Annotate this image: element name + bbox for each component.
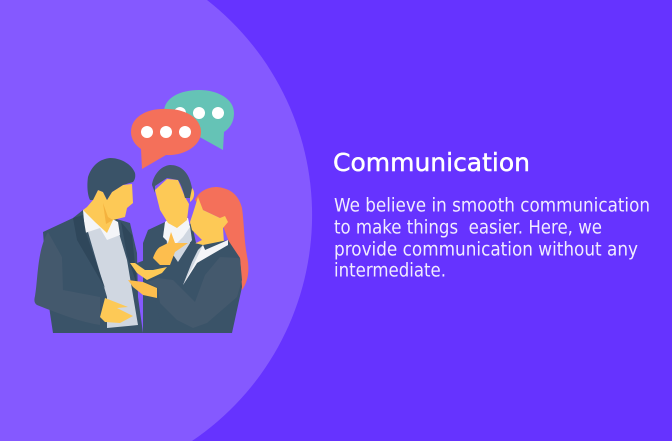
large light purple circle xyxy=(0,0,312,441)
body text: intermediate. xyxy=(334,260,446,282)
body text: provide communication without any xyxy=(334,240,638,260)
icon: red speech bubble xyxy=(131,109,201,169)
body text: to make things easier. Here, we xyxy=(334,218,602,238)
person: middle man xyxy=(137,165,215,333)
person: woman xyxy=(128,187,248,333)
body text: We believe in smooth communication xyxy=(334,196,650,216)
person: left man xyxy=(34,158,143,333)
illustration: three people talking xyxy=(34,90,248,333)
body text xyxy=(334,196,650,282)
heading: Communication xyxy=(333,148,530,177)
icon: teal speech bubble xyxy=(164,90,234,150)
